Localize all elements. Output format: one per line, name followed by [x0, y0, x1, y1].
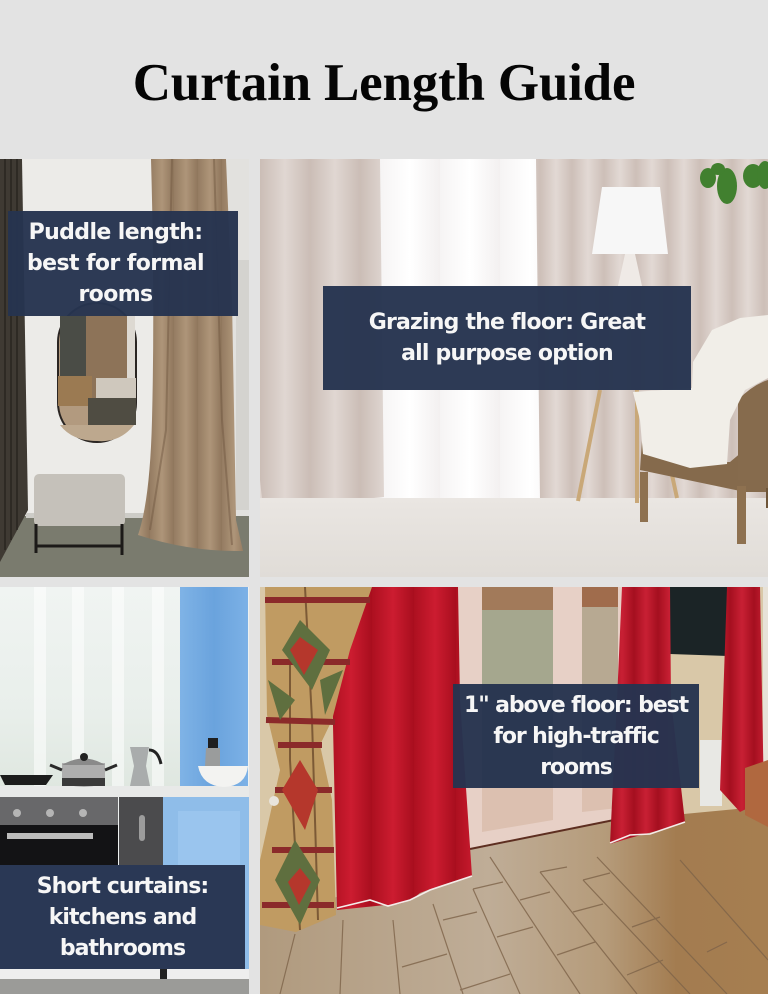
- caption: puddle length: best for formal: [27, 251, 204, 276]
- bowl: [198, 766, 248, 787]
- caption: grazing the floor: Grazing the floor: Great: [369, 310, 645, 335]
- grinder: [205, 738, 220, 767]
- patterned tieback curtain: [260, 587, 372, 932]
- carpet: [260, 498, 768, 577]
- tan curtain: [138, 159, 243, 551]
- caption: grazing the floor: all purpose option: [401, 341, 613, 366]
- red curtains: [330, 587, 764, 910]
- caption: puddle length: Puddle length:: [29, 220, 202, 245]
- bench: [34, 474, 125, 555]
- lamp: [578, 187, 677, 503]
- caption: one inch above floor: rooms: [540, 754, 612, 780]
- oven: [0, 797, 118, 870]
- moka pot: [130, 747, 161, 786]
- pan: [0, 775, 53, 785]
- radiator: [700, 740, 722, 806]
- blue curtain: [180, 587, 248, 787]
- panel: grazing the floor photo: [260, 159, 768, 577]
- counter: [0, 786, 249, 797]
- sheer curtain: [0, 587, 180, 787]
- mirror: [57, 302, 137, 443]
- ottoman: [745, 760, 768, 827]
- caption: one inch above floor: for high-traffic: [493, 724, 659, 748]
- panel: one inch above floor photo: [260, 587, 768, 994]
- caption: one inch above floor: [453, 684, 699, 788]
- caption: short curtains: bathrooms: [60, 936, 185, 960]
- panel: puddle length photo: [0, 159, 249, 577]
- caption: one inch above floor: 1" above floor: best: [464, 692, 688, 718]
- caption: short curtains: kitchens and: [49, 904, 196, 930]
- glass door: [458, 587, 624, 849]
- pot: [50, 753, 117, 787]
- caption: puddle length: rooms: [78, 282, 153, 307]
- caption: short curtains: [0, 865, 245, 969]
- caption: grazing the floor: [323, 286, 691, 390]
- throw blanket: [633, 315, 768, 468]
- wood floor: [260, 806, 768, 994]
- panel: short curtains photo: [0, 587, 260, 994]
- plant: [700, 161, 768, 204]
- caption: puddle length: [8, 211, 238, 316]
- title: Curtain Length Guide: [133, 54, 635, 112]
- caption: short curtains: Short curtains:: [37, 874, 208, 898]
- wicker chair: [640, 380, 768, 544]
- tv: [670, 587, 757, 657]
